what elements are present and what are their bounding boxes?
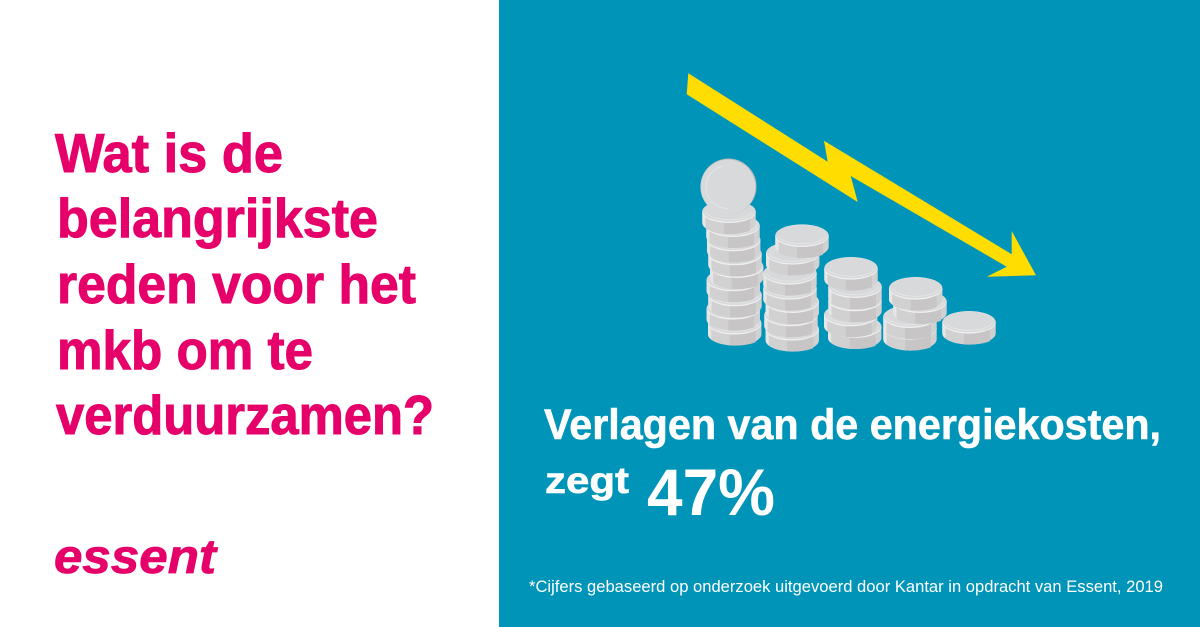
text: zegt: zegt — [545, 460, 629, 501]
panel: teal right background — [499, 0, 1200, 627]
text: 47 percent: 47% — [647, 455, 775, 529]
text: main statement: Verlagen van de energiekosten, — [544, 401, 1161, 449]
heading: question: reden voor het — [57, 254, 416, 315]
upright coin — [700, 158, 756, 214]
heading: question: belangrijkste — [57, 188, 378, 249]
heading: question: Wat is de — [55, 123, 283, 184]
text: source footnote: *Cijfers gebaseerd op onderzoek uitgevoerd door Kantar in opdracht van Essent, 2019 — [529, 578, 1163, 596]
coin stack 3 — [824, 257, 882, 349]
arrow: falling yellow zigzag — [687, 73, 1036, 277]
icon: stacks of coins — [700, 158, 996, 352]
coin stack 2 — [763, 224, 829, 352]
coin stack 4 — [883, 277, 947, 351]
coin stack 5 — [942, 311, 996, 345]
panel: white left background — [0, 0, 499, 627]
logo: essent: essent — [54, 531, 218, 584]
heading: question: verduurzamen? — [56, 385, 434, 446]
heading: question — [55, 123, 434, 446]
heading: question: mkb om te — [57, 320, 313, 381]
coin stack 1 — [702, 200, 763, 346]
